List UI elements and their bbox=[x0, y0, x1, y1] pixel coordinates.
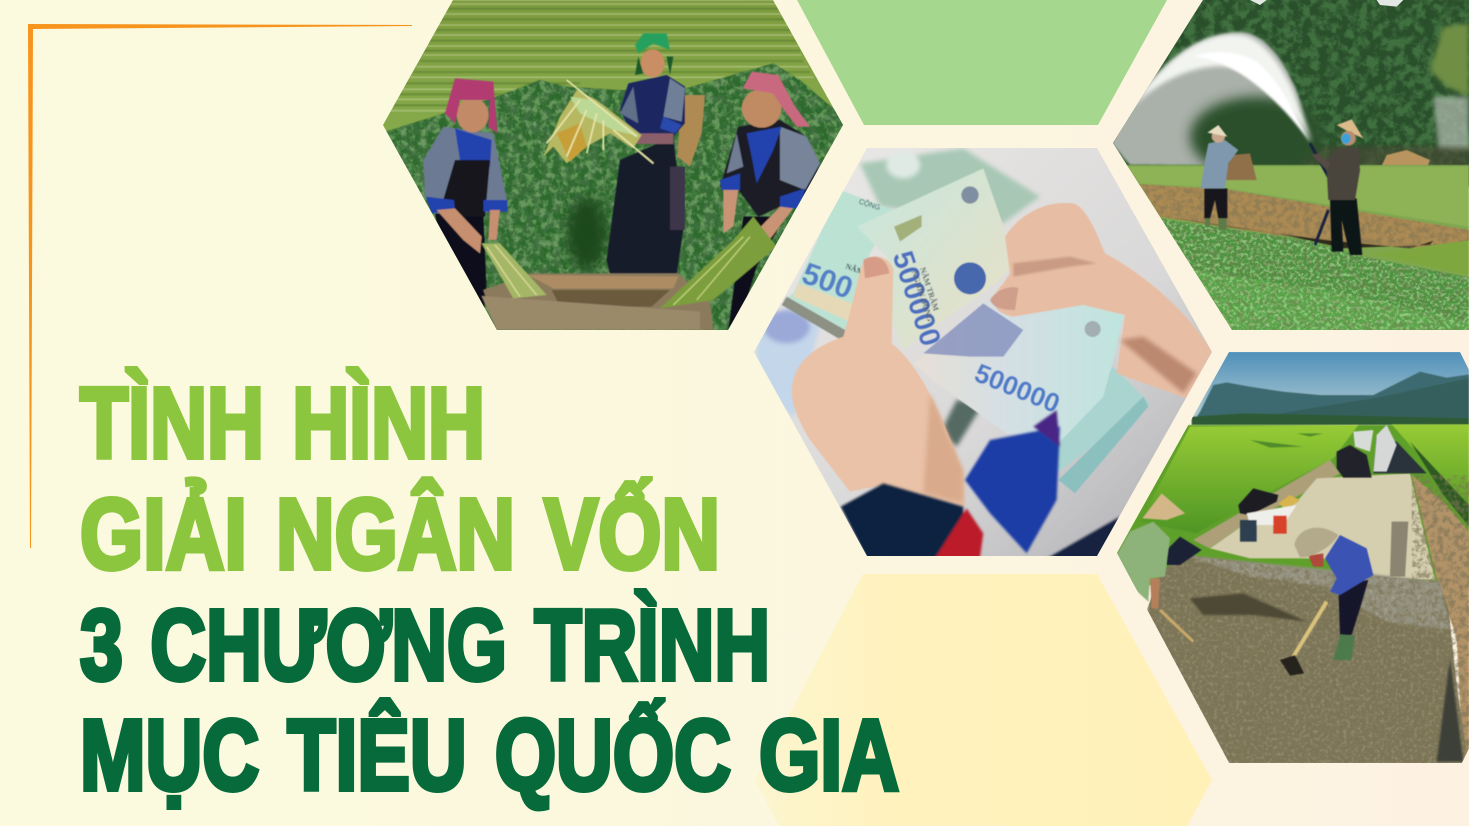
woman with backpack basket and rice sheaf, centre bbox=[543, 33, 705, 274]
left hand bbox=[792, 256, 965, 507]
water spray arc bbox=[1112, 33, 1323, 177]
banknote, curled top: 500000 bbox=[886, 247, 947, 350]
title line 1: TÌNH HÌNH bbox=[80, 368, 485, 480]
women and rice cart bbox=[423, 33, 820, 330]
farmer with hay bundle bbox=[1201, 125, 1257, 230]
far workers and materials bbox=[1165, 430, 1408, 577]
terraced fields bbox=[380, 0, 850, 333]
blurred background banknotes bbox=[757, 148, 1040, 447]
sky and mountains bbox=[1187, 352, 1469, 425]
worker in blue jacket with shovel bbox=[1280, 528, 1373, 676]
road under construction bbox=[1210, 425, 1469, 763]
banknote stack, teal edges bbox=[1057, 367, 1150, 493]
fresh concrete surface bbox=[1143, 552, 1469, 765]
photo: ethnic minority women harvesting rice bbox=[380, 0, 850, 333]
hay stacks and tarp bbox=[1382, 150, 1430, 166]
tree line bbox=[1110, 0, 1469, 187]
banknote stack, left: CỘNG bbox=[858, 197, 882, 212]
title line 4: MỤC TIÊU QUỐC GIA bbox=[80, 700, 899, 812]
green foliage bbox=[380, 60, 850, 333]
field rows bbox=[1123, 165, 1469, 332]
farmer with hose bbox=[1310, 119, 1363, 255]
banknote, lower: 500000 bbox=[970, 358, 1064, 419]
empty green hexagon bbox=[797, 0, 1167, 125]
empty yellow hexagon bbox=[755, 574, 1212, 826]
title block bbox=[80, 368, 899, 812]
banknote, curled top: NGHÌN ĐỒNG bbox=[910, 269, 936, 323]
decorative orange corner line bbox=[28, 24, 412, 548]
rice fields bbox=[1110, 424, 1469, 585]
title line 3: 3 CHƯƠNG TRÌNH bbox=[80, 590, 770, 702]
banknote stack, left: 500 bbox=[798, 256, 857, 306]
right hand bbox=[990, 203, 1212, 398]
sleeve and blue-red scarf bbox=[841, 410, 1120, 558]
banknote, curled top: NĂM TRĂM bbox=[918, 266, 942, 312]
rice bundles and wooden cart bbox=[482, 217, 777, 330]
banknote stack, left bbox=[782, 190, 893, 343]
title line 2: GIẢI NGÂN VỐN bbox=[80, 478, 720, 590]
woman left bbox=[423, 78, 508, 330]
photo: hands counting 500000 dong banknotes bbox=[750, 147, 1217, 558]
woman right bbox=[720, 72, 820, 330]
rice sheaf bbox=[543, 90, 642, 163]
banknote, curled top bbox=[857, 168, 1012, 350]
banknote stack, left: NĂM bbox=[844, 261, 866, 277]
banknote, lower bbox=[913, 297, 1123, 442]
photo: workers pouring concrete rural road bbox=[1110, 352, 1469, 765]
worker in camouflage shirt bbox=[1117, 493, 1193, 642]
photo: farmers watering vegetable field bbox=[1110, 0, 1469, 332]
